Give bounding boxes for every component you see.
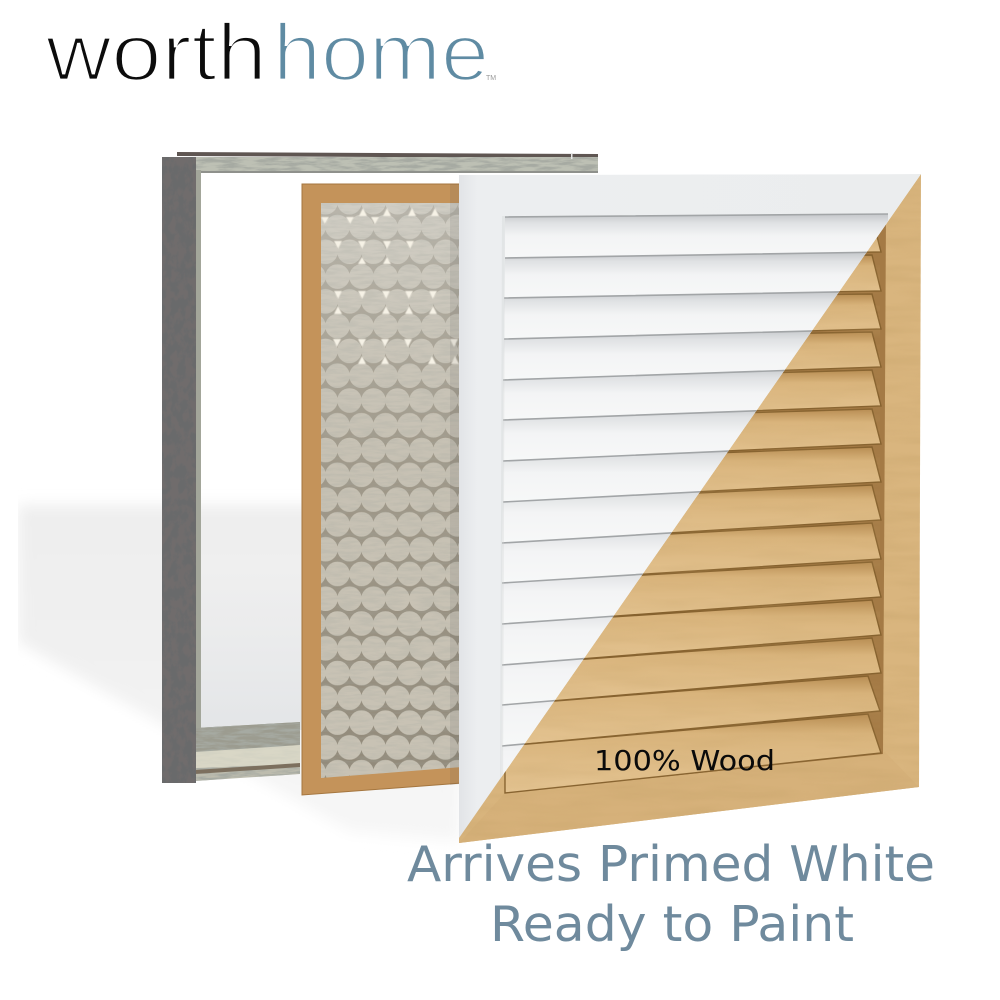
white stile shade [500,216,505,800]
wood grain [459,174,921,843]
wood frame [459,174,921,843]
filter disc media [321,203,462,778]
logo: worthhome [45,8,496,98]
metal sleeve frame [162,152,598,783]
white slats [502,214,888,793]
caption line 1: Arrives Primed White [407,836,935,893]
wood slat grain [505,217,880,793]
filter glints [321,208,459,364]
logo: worthhome: home [273,8,489,98]
wood opening recess [505,214,886,793]
bottom rail [195,722,300,781]
white slat edges [502,214,888,746]
white frame [459,174,921,843]
wood louver: full wood base [459,174,921,843]
label: 100% Wood: 100% Wood [594,745,775,777]
wood slats [505,217,881,793]
shadow seen through metal frame opening [201,570,302,730]
background floor shadow [0,430,460,842]
logo: worthhome: worth [45,8,267,98]
filter right shadow [450,184,460,785]
top rail [177,152,598,173]
wood frame lower shade [459,752,919,843]
left post [162,157,201,783]
white opening recess [501,213,888,800]
air filter [302,184,462,795]
white primed half of louver [459,174,921,843]
caption line 2: Ready to Paint [490,896,854,953]
filter cardboard frame [302,184,462,795]
logo: worthhome: TM [486,75,496,82]
